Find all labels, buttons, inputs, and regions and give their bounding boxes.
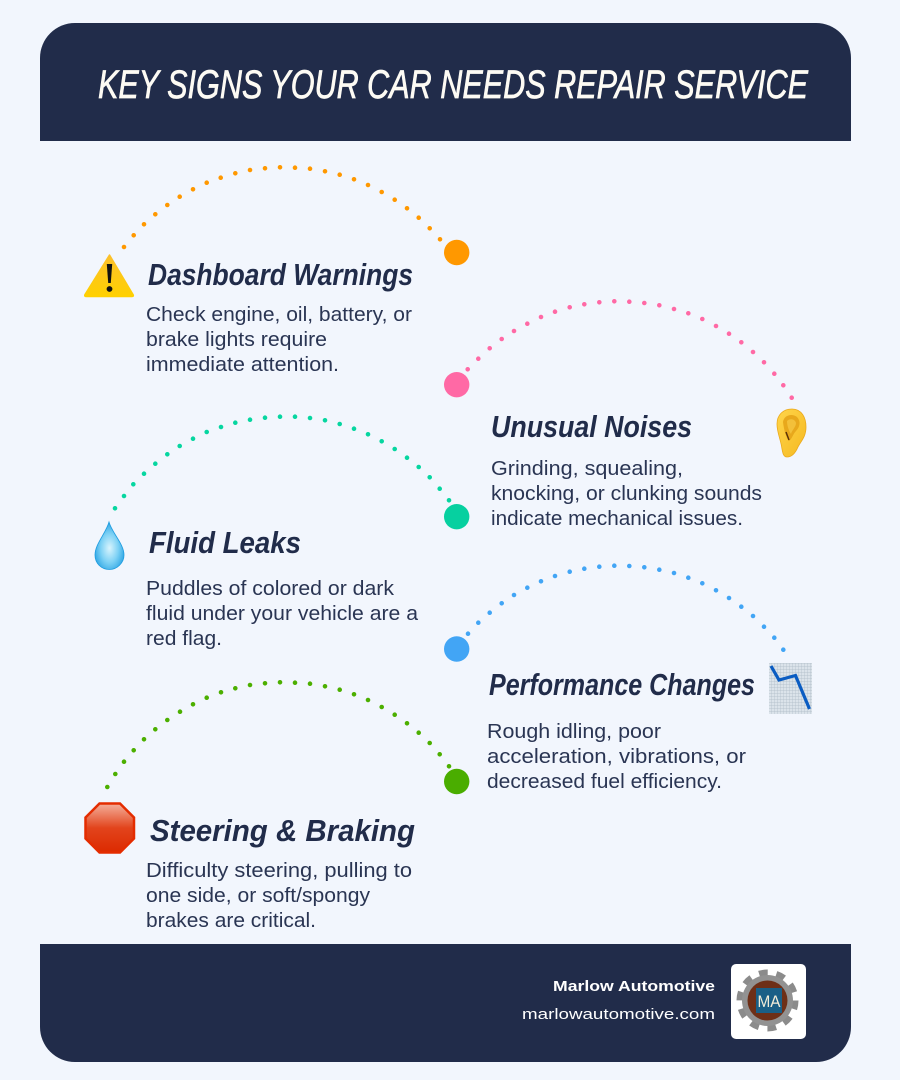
icon: warning triangle: [85, 255, 133, 296]
marker: teal dot: [444, 504, 469, 529]
panel: steering and braking: [86, 682, 469, 932]
icon: falling chart: [769, 663, 812, 714]
text block: one side, or soft/spongy: [146, 885, 370, 907]
text block: Check engine, oil, battery, or: [146, 304, 412, 326]
panel: performance changes: [444, 566, 812, 793]
marker: pink dot: [444, 372, 469, 397]
dotted arc: pink: [468, 301, 792, 398]
icon: ear: [777, 409, 806, 457]
text block: brake lights require: [146, 329, 327, 351]
text block: red flag.: [146, 628, 222, 650]
company name: Marlow Automotive: [553, 978, 715, 995]
heading: Steering & Braking: [150, 813, 415, 848]
text block: Grinding, squealing,: [491, 458, 683, 480]
heading: Performance Changes: [489, 667, 755, 702]
website: marlowautomotive.com: [522, 1006, 715, 1023]
logo: MA: [758, 992, 781, 1011]
marker: orange dot: [444, 240, 469, 265]
panel: unusual noises: [444, 301, 806, 530]
marker: blue dot: [444, 636, 469, 662]
dotted arc: blue: [468, 566, 783, 650]
heading: Dashboard Warnings: [148, 257, 413, 292]
dotted arc: orange: [124, 167, 440, 247]
text block: Rough idling, poor: [487, 721, 661, 743]
icon: water drop: [95, 522, 124, 570]
text block: immediate attention.: [146, 354, 339, 376]
text block: knocking, or clunking sounds: [491, 483, 762, 505]
panel: fluid leaks: [95, 417, 469, 650]
dotted arc: green: [107, 682, 449, 787]
text block: [146, 860, 412, 932]
icon: stop sign: [86, 804, 134, 852]
text block: Puddles of colored or dark: [146, 578, 395, 600]
heading: Unusual Noises: [491, 409, 692, 444]
text block: fluid under your vehicle are a: [146, 603, 419, 625]
header banner: [40, 23, 851, 141]
text block: [487, 721, 746, 793]
text block: [146, 578, 419, 650]
text block: acceleration, vibrations, or: [487, 746, 746, 768]
text block: decreased fuel efficiency.: [487, 771, 722, 793]
text block: [491, 458, 762, 530]
text block: brakes are critical.: [146, 910, 316, 932]
text block: indicate mechanical issues.: [491, 508, 743, 530]
text block: [146, 304, 412, 376]
footer banner: [40, 944, 851, 1062]
logo: [731, 964, 806, 1039]
marker: green dot: [444, 769, 469, 794]
dotted arc: teal: [115, 417, 449, 508]
text block: Difficulty steering, pulling to: [146, 860, 412, 882]
panel: dashboard warnings: [85, 167, 469, 376]
heading: Fluid Leaks: [149, 525, 301, 560]
